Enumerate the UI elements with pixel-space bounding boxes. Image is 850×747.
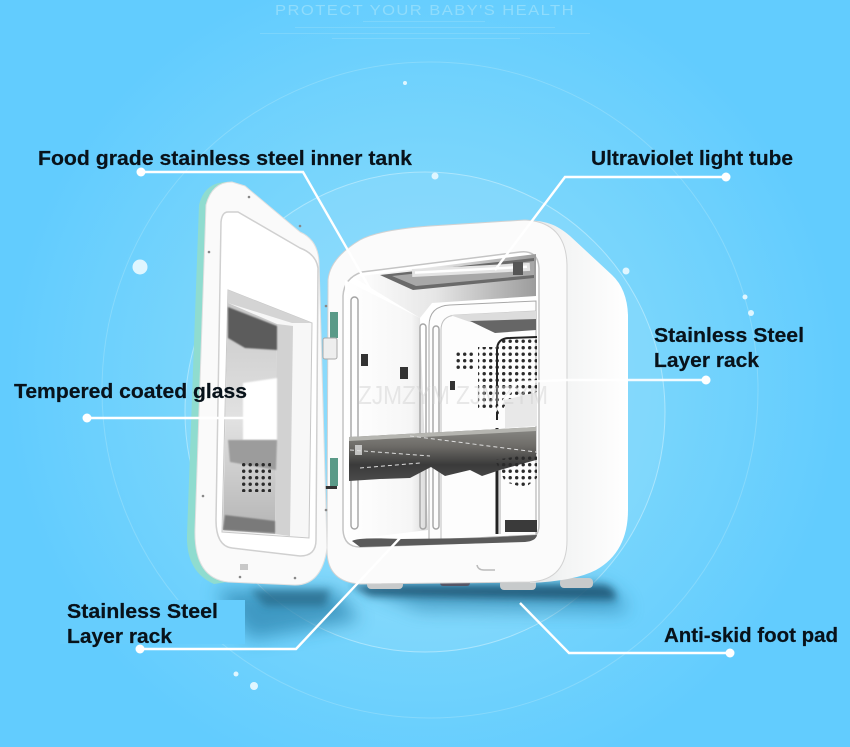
UV tube xyxy=(380,258,534,290)
hinges xyxy=(317,312,338,489)
rack clips xyxy=(361,354,455,390)
left wall xyxy=(345,280,428,540)
bottom rack xyxy=(352,535,537,547)
feet xyxy=(367,578,593,590)
ceiling shading xyxy=(353,254,536,318)
label: left rack line 2: Layer rack xyxy=(67,625,173,648)
label: right rack line 2: Layer rack xyxy=(654,349,760,372)
labels xyxy=(14,147,838,648)
callout lines xyxy=(87,172,730,653)
door logo xyxy=(240,564,248,570)
sterilizer cabinet xyxy=(317,220,628,590)
decorative dots xyxy=(132,81,754,690)
header title: PROTECT YOUR BABY'S HEALTH xyxy=(275,2,575,19)
floor shadow xyxy=(215,584,628,640)
front frame xyxy=(327,220,567,584)
side panel xyxy=(520,220,628,583)
door inner frame xyxy=(216,212,318,556)
perforated back wall xyxy=(455,337,537,534)
door screws xyxy=(202,196,327,579)
text patch xyxy=(60,600,245,644)
label: glass: Tempered coated glass xyxy=(14,380,247,403)
label: right rack: Stainless Steel xyxy=(654,324,804,347)
watermark: ZJMZYM ZJMZYM xyxy=(358,380,548,410)
label: inner tank: Food grade stainless steel inner tank xyxy=(38,147,413,170)
side slots xyxy=(351,297,439,529)
decorative rings xyxy=(102,62,758,718)
layer rack xyxy=(349,427,537,488)
label: left rack: Stainless Steel xyxy=(67,600,218,623)
upper tube xyxy=(470,319,536,333)
callout dots xyxy=(82,168,734,658)
door teal edge xyxy=(187,182,240,584)
upper ceiling shade xyxy=(450,311,536,322)
back wall frame xyxy=(429,301,536,540)
door panel xyxy=(195,182,327,585)
interior xyxy=(343,252,539,547)
label: UV tube: Ultraviolet light tube xyxy=(591,147,793,170)
front notch xyxy=(477,565,495,570)
open door xyxy=(187,182,327,585)
glass window xyxy=(222,290,312,538)
label: foot pad: Anti-skid foot pad xyxy=(664,624,838,647)
